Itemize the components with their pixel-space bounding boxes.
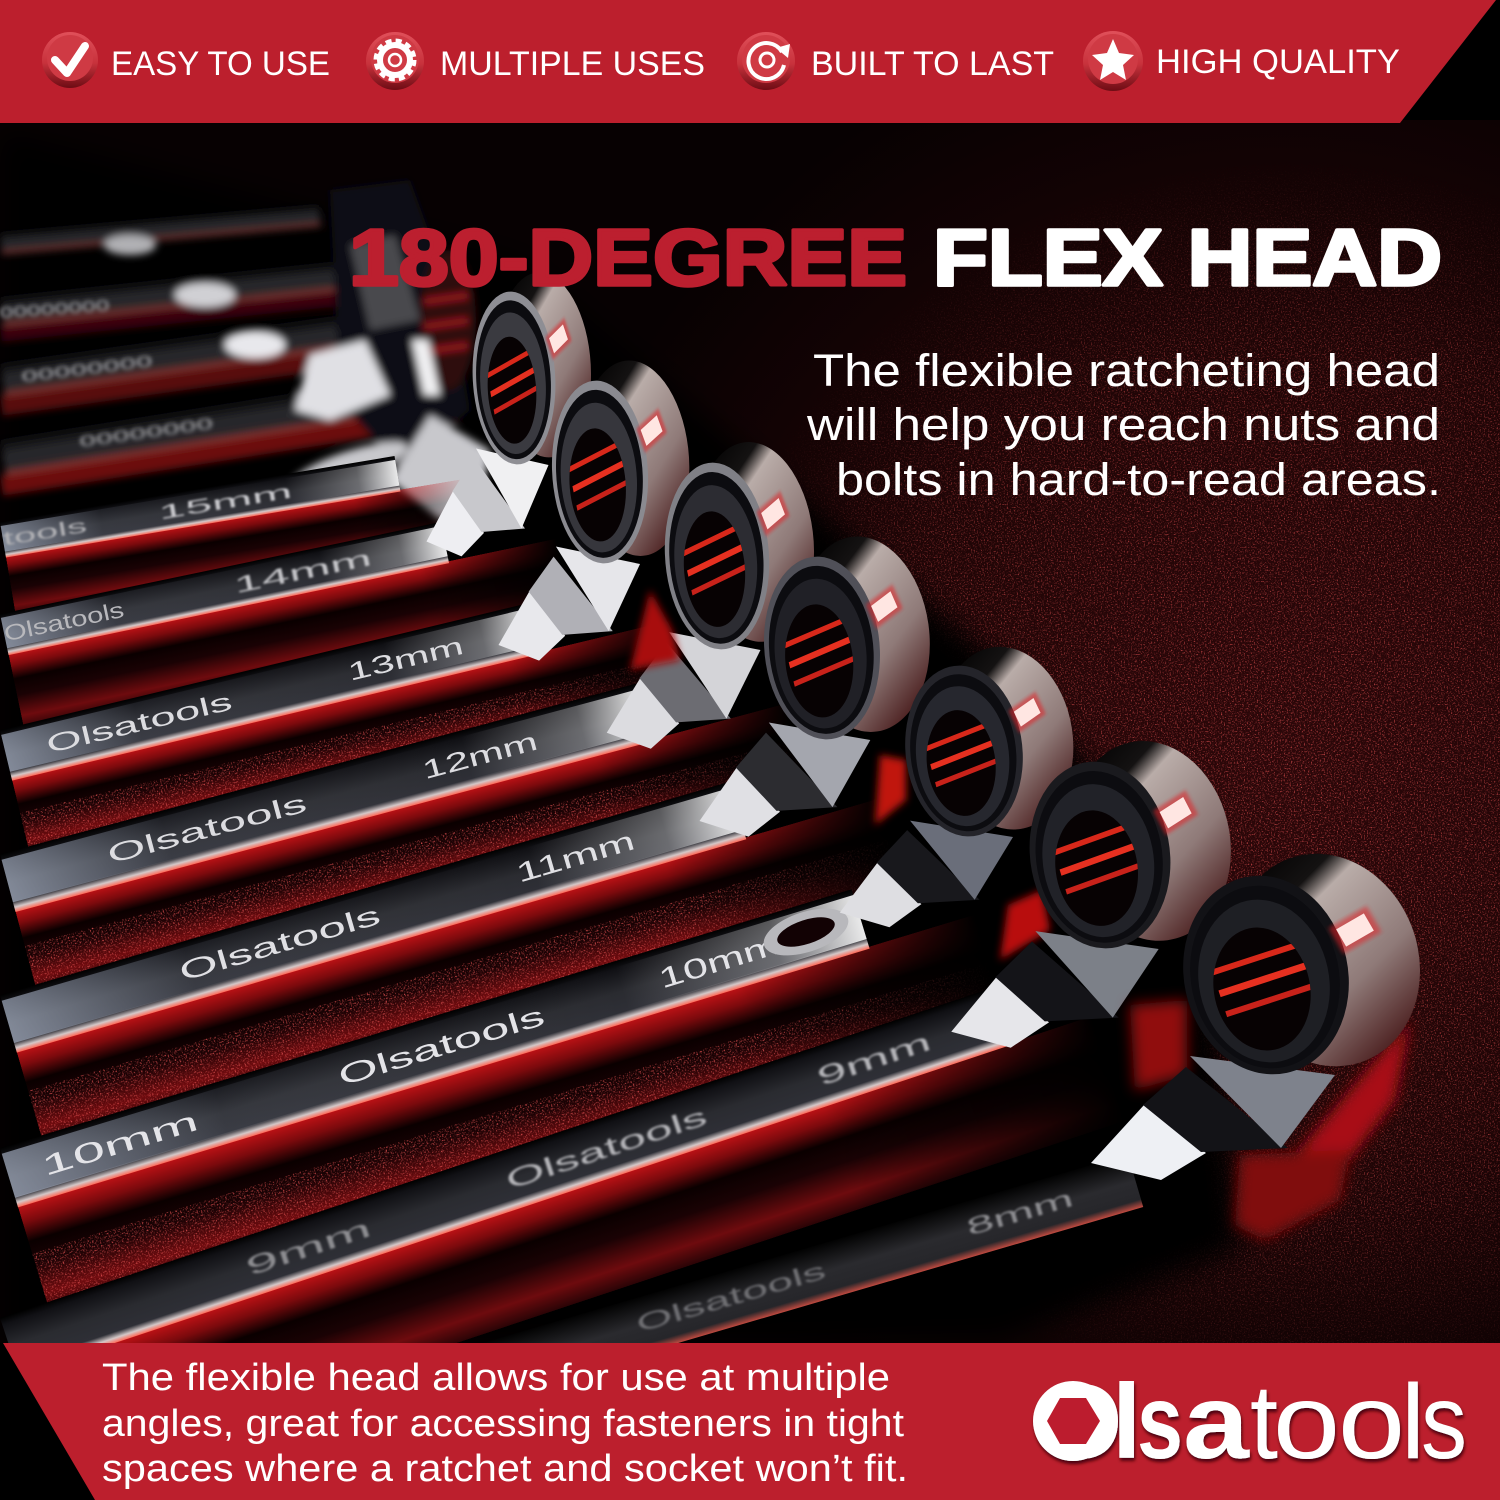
wrench row J: 10mm <box>2 889 983 1302</box>
wrench head 7 <box>426 249 606 556</box>
wrench row L: 8mm: Olsatools <box>633 1257 829 1338</box>
top banner <box>0 0 1496 123</box>
icon: cycle arrows <box>737 32 795 90</box>
wrench row H: 12mm <box>1 683 793 985</box>
wrench row F: 14mm <box>0 523 551 724</box>
wrench row J: 10mm: 10mm <box>38 1105 202 1182</box>
logo: Olsatools: O <box>1040 1363 1122 1481</box>
logo: Olsatools: t <box>1250 1363 1278 1481</box>
feature: easy to use <box>42 32 330 88</box>
wrench row G: 13mm: Olsatools <box>44 688 235 759</box>
feature: high quality <box>1083 31 1400 91</box>
wrench row K: 9mm: 9mm <box>813 1026 935 1092</box>
wrench head 3 <box>840 624 1094 927</box>
wrench row F: 14mm: Olsatools <box>2 597 126 646</box>
wrench row H: 12mm: 12mm <box>419 726 541 785</box>
heading: FLEX HEAD <box>933 213 1442 302</box>
wrench head 2 <box>951 716 1256 1048</box>
wrench row I: 11mm: 11mm <box>513 825 638 888</box>
wrench head 5 <box>607 417 833 749</box>
wrench row I: 11mm: Olsatools <box>176 900 384 987</box>
red reflection beside head 5 <box>630 590 680 670</box>
heading: 180-DEGREE <box>349 213 907 302</box>
right text block: will help you reach nuts and <box>806 399 1440 450</box>
heading <box>349 213 1442 302</box>
logo: Olsatools: o <box>1273 1363 1340 1481</box>
wrench row G: 13mm: 13mm <box>345 632 466 687</box>
bottom text block: spaces where a ratchet and socket won’t fit. <box>102 1448 908 1490</box>
wrench row L: 8mm: 8mm <box>963 1185 1077 1242</box>
wrench row J: 10mm: Olsatools <box>334 1000 548 1092</box>
logo: Olsatools <box>1033 1363 1467 1481</box>
wrench row K: 9mm: Olsatools <box>502 1101 711 1195</box>
wrench row F: 14mm: 14mm <box>232 545 374 598</box>
back wrench label: blurred lettering: oooooooo <box>0 293 110 323</box>
wrench row K: 9mm <box>2 991 1099 1343</box>
wrench row J: 10mm: 10mm <box>655 928 784 994</box>
bottom text block <box>102 1357 908 1490</box>
back wrench label: blurred lettering: oooooooo <box>78 411 214 452</box>
icon: check mark <box>42 32 98 88</box>
feature: built to last <box>737 32 1054 90</box>
wrench head 6 <box>498 336 706 661</box>
wrench row H: 12mm: Olsatools <box>104 788 310 870</box>
logo: Olsatools: l <box>1112 1363 1141 1481</box>
logo: Olsatools: s <box>1137 1363 1183 1481</box>
bottom text block: The flexible head allows for use at multiple <box>102 1357 890 1399</box>
feature: high quality: HIGH QUALITY <box>1156 43 1400 81</box>
wrench row E: 15mm <box>0 456 460 611</box>
wrench row K: 9mm: 9mm <box>242 1212 375 1282</box>
wrench row E: 15mm: tools <box>1 516 89 551</box>
icon: star <box>1083 31 1143 91</box>
back wrench label: blurred lettering <box>0 293 214 452</box>
logo: Olsatools: l <box>1401 1363 1425 1481</box>
red surface reflection around front head <box>1130 1000 1410 1240</box>
feature: multiple uses <box>366 32 705 90</box>
red reflection beside head 3 <box>1000 890 1050 960</box>
logo: Olsatools: a <box>1183 1363 1250 1481</box>
wrench row I: 11mm <box>2 782 883 1136</box>
wrench eye opening on 10mm neck <box>758 899 854 965</box>
right text block: The flexible ratcheting head <box>813 345 1440 396</box>
back wrench label: blurred lettering: oooooooo <box>20 349 154 387</box>
logo: Olsatools: o <box>1338 1363 1405 1481</box>
logo: Olsatools: s <box>1421 1363 1467 1481</box>
wrench head 4 <box>700 512 950 837</box>
right text block: bolts in hard-to-read areas. <box>836 454 1441 505</box>
right text block <box>806 345 1441 505</box>
feature: multiple uses: MULTIPLE USES <box>440 45 705 83</box>
bottom banner <box>3 1343 1500 1500</box>
wrench row L: 8mm <box>0 1154 1143 1500</box>
wrench row G: 13mm <box>1 604 648 846</box>
bottom text block: angles, great for accessing fasteners in tight <box>102 1403 904 1445</box>
wrench row E: 15mm: 15mm <box>157 482 294 525</box>
red reflection beside head 4 <box>875 755 906 825</box>
feature: built to last: BUILT TO LAST <box>811 45 1054 83</box>
blurred back wrenches <box>0 180 490 520</box>
feature: easy to use: EASY TO USE <box>111 45 330 83</box>
cover under bottom banner <box>0 1343 1500 1500</box>
wrench head 1 <box>1091 827 1449 1180</box>
icon: gear <box>366 32 424 90</box>
